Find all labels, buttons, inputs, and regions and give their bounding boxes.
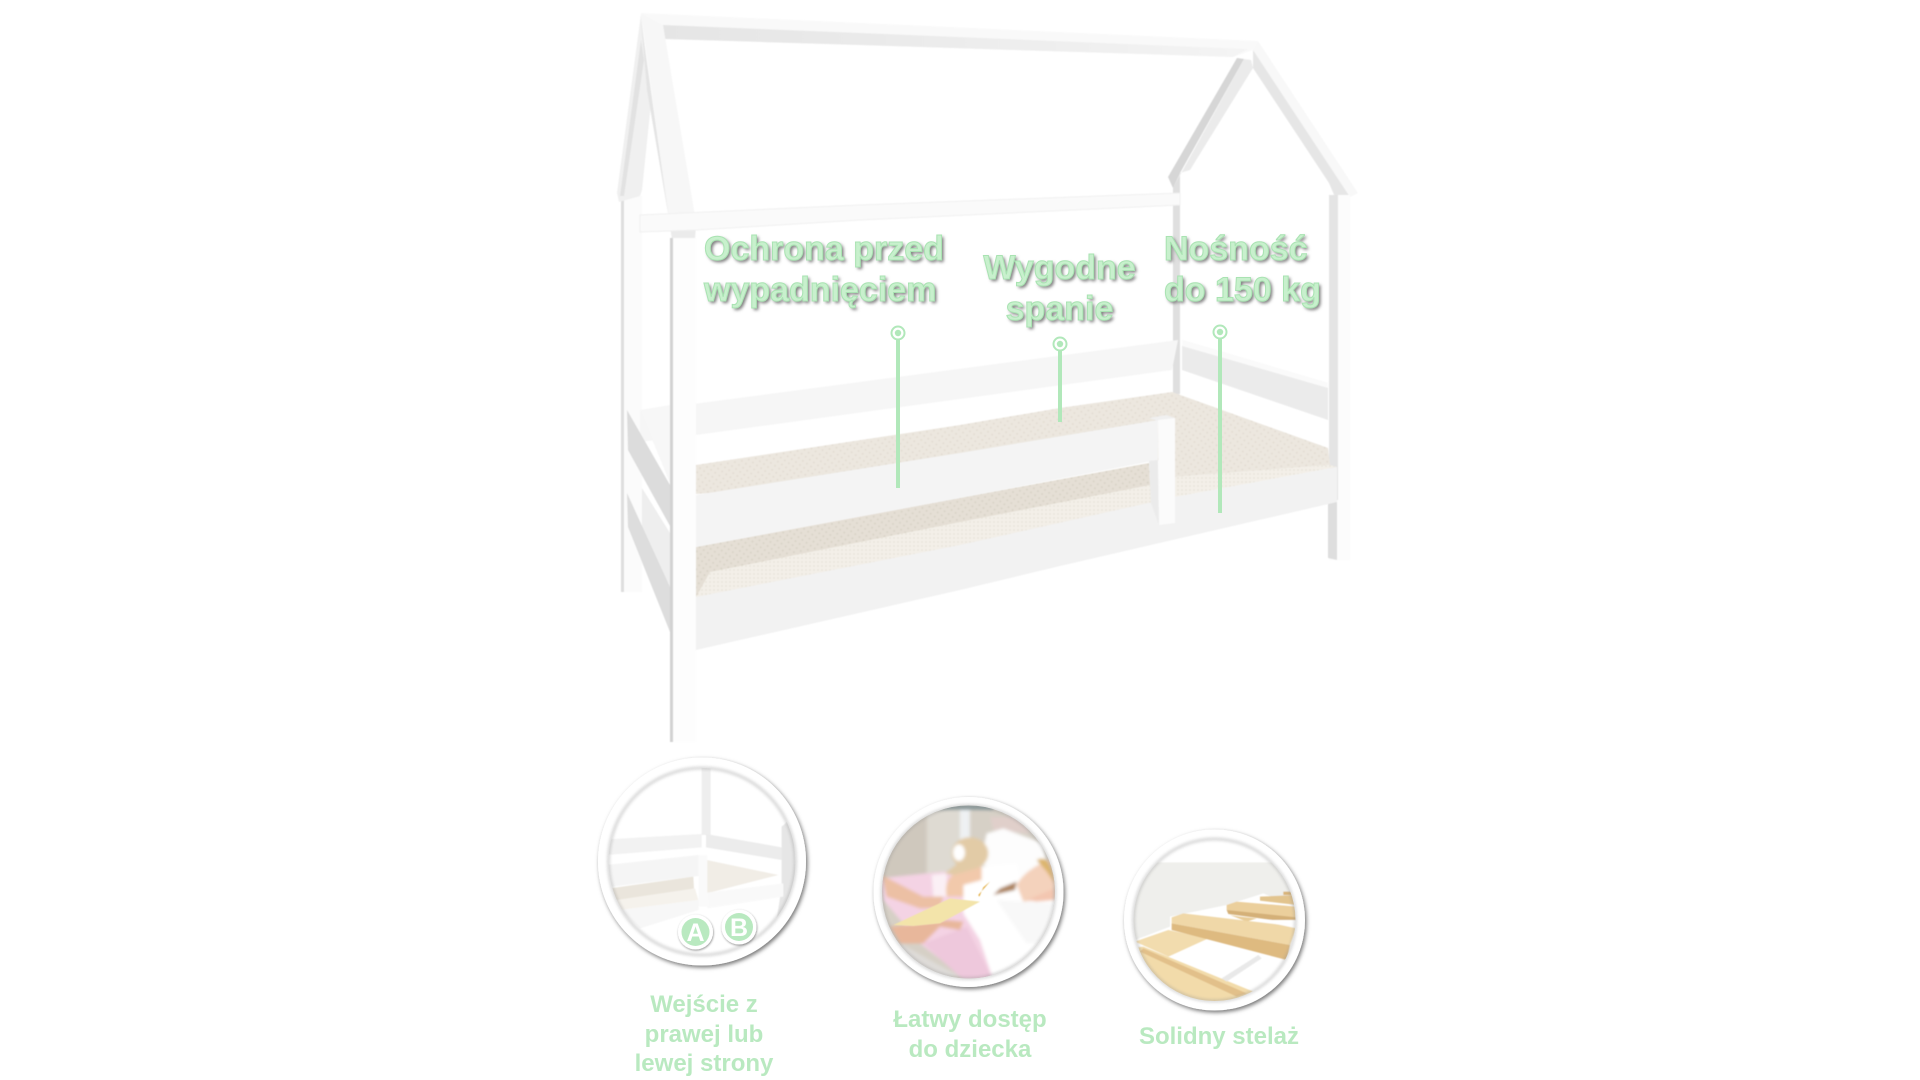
badge: B	[722, 910, 756, 944]
rear right rafter	[1168, 58, 1253, 188]
label: comfortable sleep	[982, 249, 1138, 332]
upper side rail	[640, 193, 1180, 232]
caption: easy access to child: Łatwy dostęp	[893, 1006, 1047, 1033]
pointer: comfortable sleep	[1054, 338, 1066, 422]
label: load capacity	[1164, 230, 1323, 312]
mattress top	[696, 392, 1330, 494]
badge: A	[678, 914, 713, 950]
caption: entry from either side: Wejście z	[650, 991, 758, 1018]
front left post	[670, 238, 696, 742]
right front rafter	[1253, 41, 1358, 204]
caption: easy access to child: do dziecka	[909, 1036, 1031, 1062]
rear right post	[1173, 172, 1190, 394]
circle: bed entry detail	[598, 758, 810, 970]
left side rails	[627, 405, 670, 632]
front board	[696, 467, 1337, 650]
mattress side right	[1175, 465, 1337, 497]
label: fall protection	[703, 230, 946, 312]
label: load capacity: Nośność	[1164, 230, 1308, 268]
label: fall protection: Ochrona przed	[704, 230, 944, 268]
rear left rafter	[617, 14, 651, 202]
right short rail	[1182, 340, 1328, 420]
circle: parent reading to child photo	[874, 797, 1064, 987]
caption: entry from either side: prawej lub	[645, 1020, 763, 1048]
bed illustration	[617, 13, 1358, 742]
caption: entry from either side: lewej strony	[635, 1050, 773, 1077]
pointer: load capacity	[1214, 326, 1226, 513]
safety rail post	[1149, 415, 1175, 525]
right front post	[1328, 195, 1350, 560]
caption: solid frame: Solidny stelaż	[1139, 1023, 1299, 1050]
caption: entry from either side	[635, 991, 774, 1077]
label: fall protection: wypadnięciem	[704, 270, 936, 308]
pointer: fall protection	[892, 326, 904, 488]
rear left post	[621, 196, 642, 592]
badge: B: B	[730, 914, 748, 942]
badge: A: A	[686, 919, 705, 947]
circle: wooden slat frame	[1124, 830, 1310, 1010]
label: comfortable sleep: spanie	[1006, 290, 1113, 328]
label: comfortable sleep: Wygodne	[983, 249, 1136, 287]
roof ridge beam	[641, 13, 1258, 57]
safety rail	[696, 420, 1158, 547]
caption: easy access to child	[893, 1006, 1047, 1062]
mattress front	[696, 463, 1151, 597]
label: load capacity: do 150 kg	[1164, 270, 1321, 308]
front left rafter	[641, 13, 696, 247]
book	[893, 882, 990, 926]
rear long rail	[640, 340, 1178, 442]
